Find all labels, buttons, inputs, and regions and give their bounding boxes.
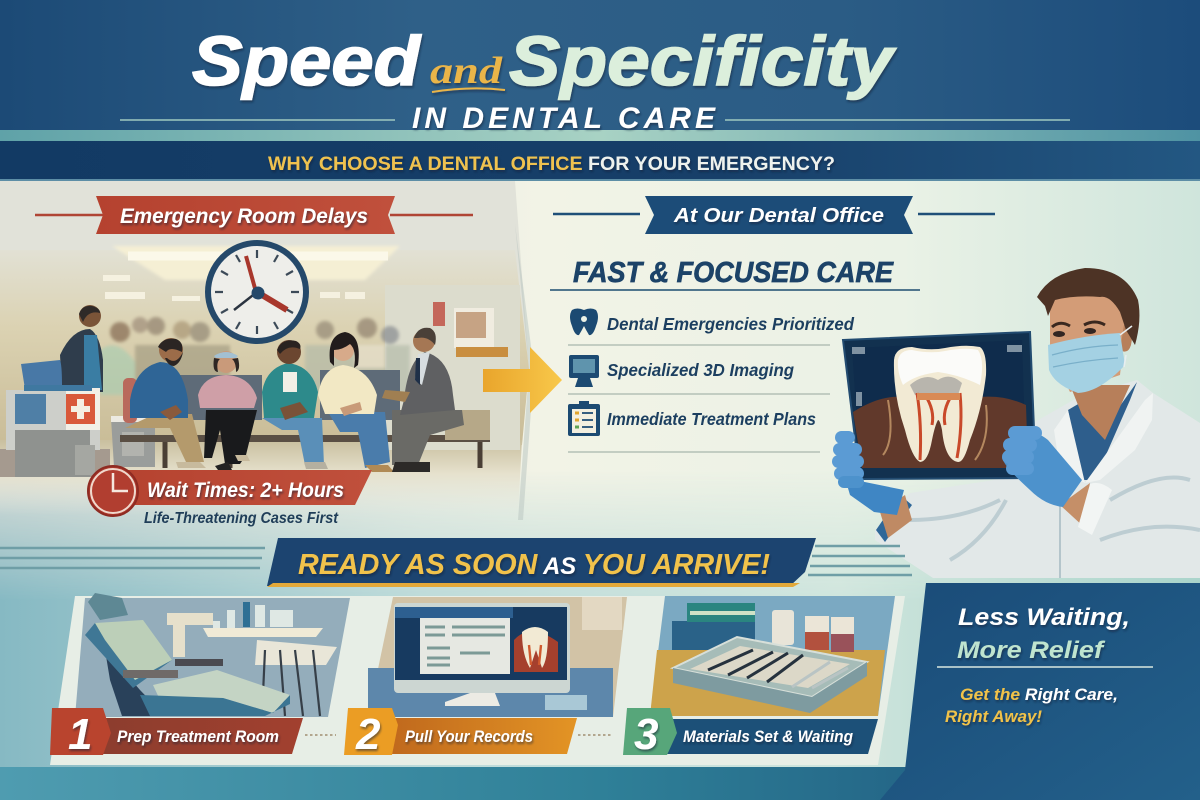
background crowd (100, 317, 410, 395)
main title (192, 22, 896, 100)
red heading ribbon (35, 196, 473, 234)
bench (120, 370, 490, 468)
face mask (1048, 326, 1132, 393)
step 2 label: Pull Your Records (405, 727, 533, 746)
wall clock (205, 240, 309, 344)
wait time badge (88, 466, 372, 516)
dentist holding x-ray tablet (832, 268, 1200, 578)
step 3 label: Materials Set & Waiting (683, 727, 854, 746)
step 3 label: 3 (634, 710, 658, 759)
waiting room scene (0, 181, 529, 515)
closing callout: Right Away! (945, 707, 1042, 726)
patient pink sweater (198, 351, 257, 470)
closing callout: Get the Right Care, (960, 685, 1118, 704)
closing callout: Less Waiting, (958, 604, 1130, 631)
main title: Specificity (509, 22, 896, 100)
red heading ribbon: Emergency Room Delays (120, 204, 368, 228)
main title: Speed (192, 22, 421, 100)
page background (0, 181, 1200, 800)
header banner (0, 0, 1200, 181)
item: imaging (569, 355, 794, 387)
item: emergencies: Dental Emergencies Prioritized (607, 314, 854, 334)
man in gray suit (382, 328, 464, 472)
reception desk (6, 360, 100, 477)
subtitle question: WHY CHOOSE A DENTAL OFFICE FOR YOUR EMERGENCY? (268, 154, 835, 175)
title subline: IN DENTAL CARE (412, 102, 716, 135)
tooth on tablet (894, 346, 986, 462)
step 2 label (344, 708, 577, 759)
patient cream sweater (318, 332, 394, 472)
wait time note: Life-Threatening Cases First (144, 510, 339, 527)
left glove (832, 431, 904, 515)
step 1 illustration (75, 593, 350, 717)
step 1 label: Prep Treatment Room (117, 727, 279, 746)
item: emergencies (570, 308, 854, 335)
patient blue shirt (125, 338, 206, 468)
steps panel (50, 593, 905, 765)
ready banner (0, 538, 912, 587)
item: treatment plans (568, 401, 816, 436)
item: imaging: Specialized 3D Imaging (607, 360, 794, 380)
neck (1070, 385, 1130, 440)
step 2 illustration (368, 597, 627, 717)
step 1 label: 1 (68, 710, 92, 759)
tablet (843, 332, 1036, 479)
navy heading ribbon: At Our Dental Office (673, 204, 884, 227)
coat cuff (1078, 483, 1112, 535)
item: treatment plans: Immediate Treatment Plans (607, 409, 816, 429)
step 2 label: 2 (355, 710, 381, 759)
fold edge (515, 224, 534, 520)
wait time badge: Wait Times: 2+ Hours (147, 479, 344, 502)
closing callout: More Relief (957, 637, 1105, 664)
step 3 illustration (650, 596, 895, 716)
panel: dental office (550, 196, 995, 452)
closing callout (880, 583, 1200, 800)
ready banner: READY AS SOON AS YOU ARRIVE! (298, 549, 770, 581)
section heading: FAST & FOCUSED CARE (573, 257, 895, 289)
panel: emergency room (0, 181, 562, 527)
step 3 label (623, 708, 878, 759)
step 1 label (50, 708, 303, 759)
main title: and (430, 50, 503, 92)
navy heading ribbon (553, 196, 995, 234)
lab coat (875, 380, 1200, 578)
head and hair (1037, 268, 1139, 392)
right glove (1002, 426, 1082, 507)
trash bin (111, 416, 156, 467)
standing person (60, 305, 103, 392)
yellow arrow (483, 347, 562, 413)
patient teal jacket (262, 340, 328, 469)
arms (880, 495, 912, 538)
